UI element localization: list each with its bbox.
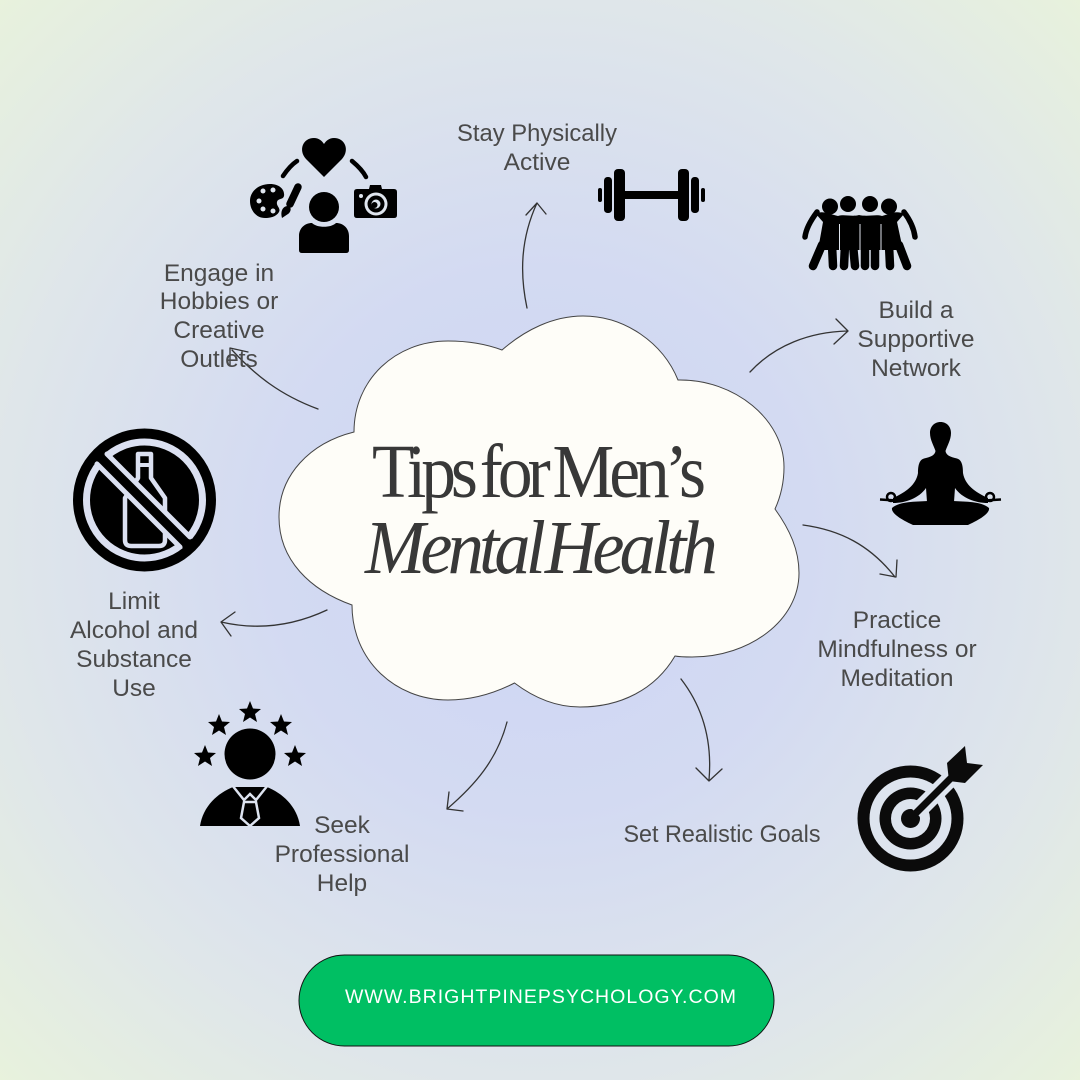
icon: hobbies person with heart, palette, camera [250,138,397,253]
text: seek professional help: Seek [314,812,371,839]
text: practice mindfulness or meditation: Meditation [840,665,954,692]
text: build a supportive network: Supportive [857,326,975,353]
arrow: to hobbies [230,348,318,409]
text: engage in hobbies or creative outlets: Creative [173,317,265,344]
title: Mental Health [364,506,715,590]
text: engage in hobbies or creative outlets: Engage in [164,260,274,287]
arrow: to limit alcohol [221,610,327,636]
arrow: to realistic goals [681,679,722,781]
icon: person with stars [194,701,306,826]
website button [299,955,774,1046]
central cloud with title [279,316,799,707]
text: engage in hobbies or creative outlets: Hobbies or [160,288,278,315]
text: set realistic goals: Set Realistic Goals [624,821,820,848]
icon: meditating figure [880,422,1001,525]
text: engage in hobbies or creative outlets: Outlets [180,346,258,373]
arrow: to mindfulness [803,525,897,577]
text: seek professional help: Professional [275,841,409,868]
text: practice mindfulness or meditation: Practice [853,607,941,634]
icon: no alcohol sign [73,428,216,572]
text: stay physically active: Active [504,149,570,176]
text: build a supportive network: Network [871,355,962,382]
arrow: to stay physically active [523,203,546,308]
title: Tips for Men’s [372,430,704,514]
icon: barbell [598,169,705,221]
text: limit alcohol and substance use: Limit [108,588,160,615]
arrow: to professional help [447,722,507,811]
text: limit alcohol and substance use: Use [112,675,156,702]
icon: target with arrow [858,746,983,872]
text: build a supportive network: Build a [879,297,954,324]
title [364,430,715,590]
website url: WWW.BRIGHTPINEPSYCHOLOGY.COM [345,986,736,1008]
text: practice mindfulness or meditation: Mindfulness or [817,636,977,663]
arrow: to supportive network [750,319,848,372]
text: limit alcohol and substance use: Alcohol and [70,617,198,644]
text: stay physically active: Stay Physically [457,120,618,147]
text: limit alcohol and substance use: Substance [76,646,192,673]
text: seek professional help: Help [317,870,367,897]
icon: group of four people [805,196,915,266]
